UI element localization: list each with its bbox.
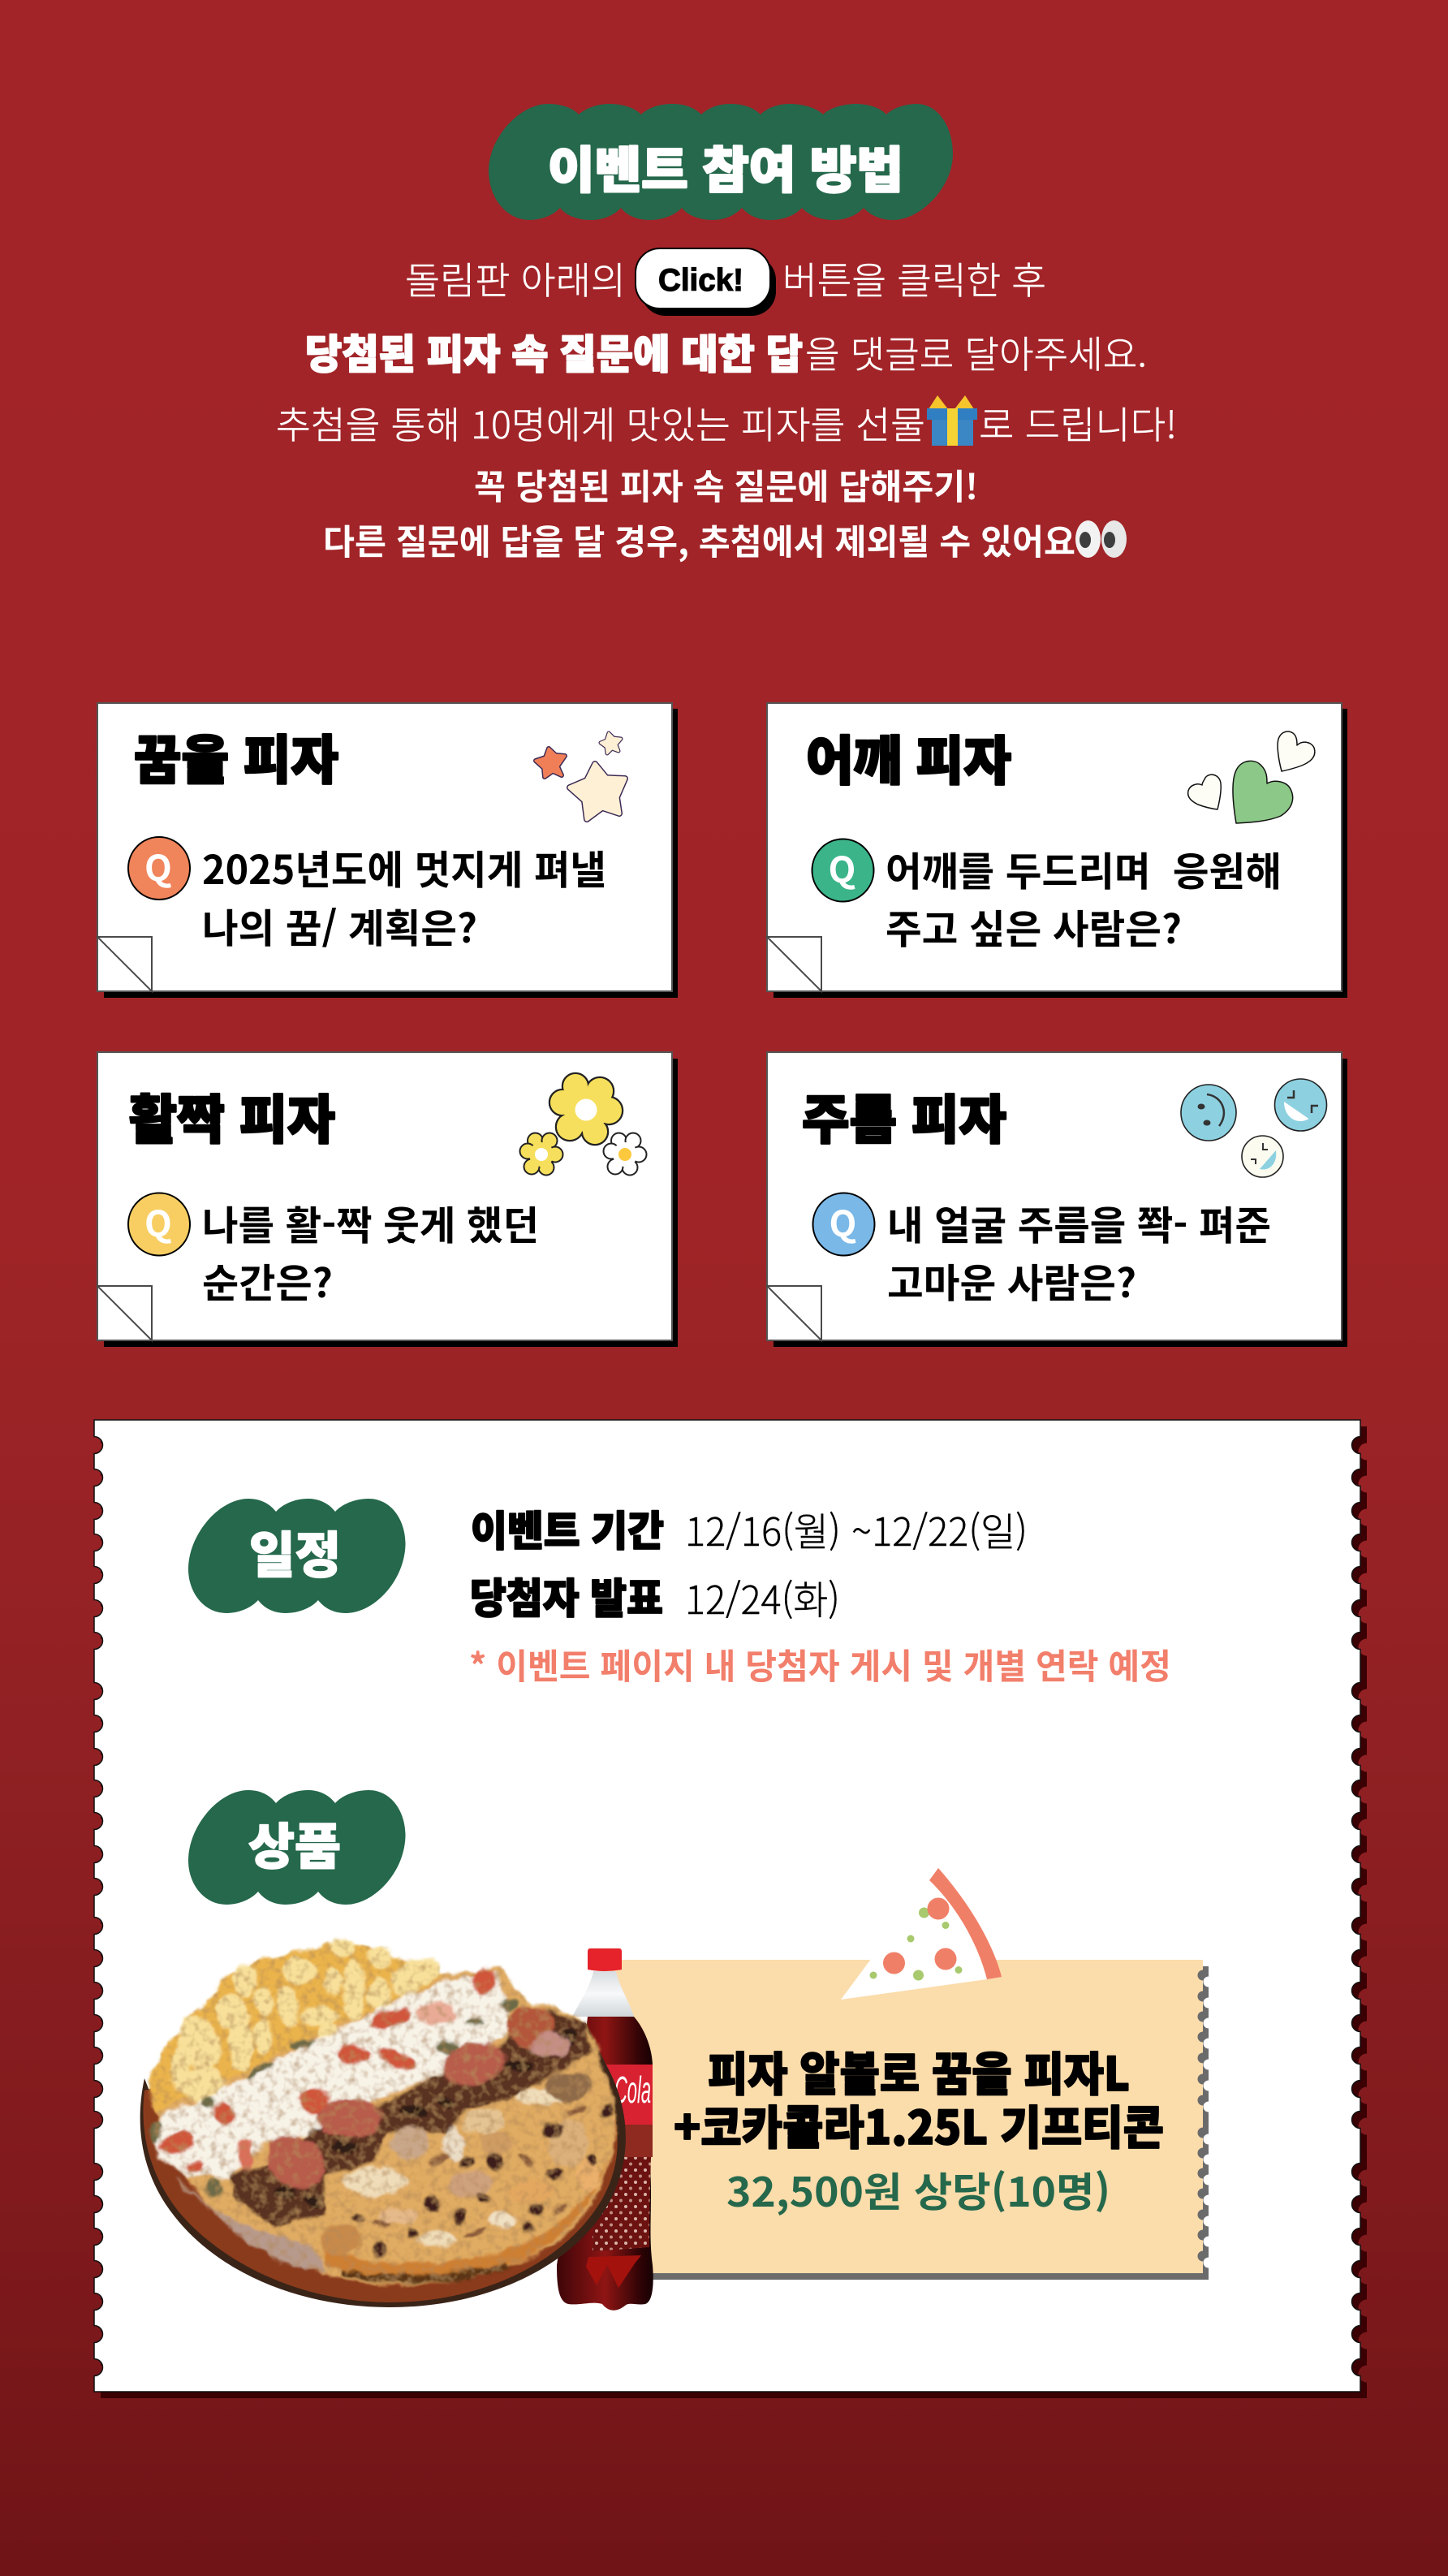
question: 나의 꿈/ 계획은?: [202, 897, 477, 955]
bottle label: [593, 2065, 653, 2125]
badge: 상품: 상품: [248, 1806, 341, 1879]
face left: [1181, 1085, 1236, 1141]
cheese and tomato band: [154, 1973, 510, 2178]
fry chunks: [170, 1938, 440, 2101]
question: 내 얼굴 주름을 쫙- 펴준: [887, 1194, 1271, 1252]
badge: 일정: [188, 1499, 406, 1613]
prize ticket: [601, 1960, 1209, 2280]
star red: [536, 749, 565, 777]
question: [887, 1194, 1271, 1310]
line 3 left: 추첨을 통해 10명에게 맛있는 피자를 선물: [276, 396, 925, 450]
icon: pizza slice: [841, 1868, 1002, 2000]
pesto traces: [150, 1999, 518, 2198]
title badge: [489, 104, 953, 220]
prize text: +코카콜라1.25L 기프티콘: [674, 2091, 1164, 2158]
card title: 활짝 피자: [129, 1077, 335, 1154]
question: 순간은?: [202, 1252, 333, 1310]
Q badge: [128, 837, 190, 900]
cola bottle: [557, 1948, 653, 2311]
line 1 right: 버튼을 클릭한 후: [782, 252, 1046, 305]
question: [886, 840, 1282, 956]
small yellow flower: [519, 1133, 563, 1176]
question: [202, 1194, 539, 1310]
line 2 emphasis: 당첨된 피자 속 질문에 대한 답: [305, 322, 803, 381]
title text: 이벤트 참여 방법: [548, 130, 903, 202]
icon: smiling faces: [1181, 1079, 1326, 1177]
line 1 left: 돌림판 아래의: [405, 252, 626, 305]
card title: 주름 피자: [802, 1077, 1006, 1154]
card title: 꿈을 피자: [134, 718, 338, 794]
card: 주름 피자: [767, 1052, 1347, 1347]
Q badge: [812, 839, 873, 901]
winners label: 당첨자 발표: [470, 1565, 663, 1625]
line 3 right: 로 드립니다!: [979, 396, 1177, 450]
Q badge: Q: [144, 839, 172, 891]
panel: schedule and prize ticket: [94, 1420, 1367, 2398]
winners date: 12/24(화): [685, 1568, 840, 1625]
badge: 상품: [188, 1790, 406, 1905]
click button: Click!: [658, 263, 743, 298]
prize text: [674, 2038, 1164, 2219]
Q badge: Q: [830, 1195, 856, 1247]
pizza photo illustration: [140, 1938, 626, 2307]
instructions text block: [276, 248, 1177, 565]
prize text: 피자 알볼로 꿈을 피자L: [708, 2038, 1130, 2104]
icon: gift: [927, 395, 977, 446]
bottle neck: [572, 1971, 634, 2017]
click button: [636, 248, 776, 316]
bottle body: [557, 2017, 653, 2311]
question: [202, 839, 606, 955]
note: * 이벤트 페이지 내 당첨자 게시 및 개별 연락 예정: [469, 1639, 1171, 1689]
pepperoni slices: [256, 2006, 570, 2198]
question: 주고 싶은 사람은?: [886, 898, 1182, 956]
question: 2025년도에 멋지게 펴낼: [202, 839, 606, 896]
meat band: [231, 2011, 593, 2227]
question: 어깨를 두드리며 응원해: [886, 840, 1282, 898]
card: 꿈을 피자: [97, 703, 678, 998]
event period label: 이벤트 기간: [471, 1498, 664, 1558]
face small: [1242, 1136, 1283, 1177]
card: 활짝 피자: [97, 1052, 678, 1347]
star big: [570, 764, 625, 819]
cream patches: [320, 2072, 600, 2255]
large yellow flower: [549, 1073, 623, 1145]
bottle flame base: [586, 2255, 641, 2288]
schedule details: [469, 1498, 1171, 1689]
almond slivers: [371, 2107, 586, 2240]
card: 어깨 피자: [767, 703, 1347, 998]
question: 나를 활-짝 웃게 했던: [202, 1194, 539, 1252]
badge: 일정: 일정: [249, 1515, 341, 1587]
Q badge: [128, 1193, 190, 1255]
question: 고마운 사람은?: [887, 1252, 1136, 1310]
icon: eyes: [1075, 520, 1127, 558]
icon: stars: [536, 733, 625, 819]
plate: [140, 2023, 626, 2307]
pizza base: [149, 1942, 616, 2285]
cola bottle: Cola: [614, 2069, 651, 2111]
dark cranberry specks: [351, 2105, 614, 2257]
line 2 rest: 을 댓글로 달아주세요.: [805, 326, 1147, 379]
line 5: 다른 질문에 답을 달 경우, 추첨에서 제외될 수 있어요: [323, 515, 1075, 565]
crust: lower edge: [325, 2151, 610, 2278]
Q badge: Q: [829, 841, 855, 893]
crust: lower left: [175, 2176, 325, 2273]
bottle cap: [588, 1948, 622, 1971]
bottle lower label stripe: [593, 2125, 653, 2157]
event period dates: 12/16(월) ~12/22(일): [685, 1500, 1028, 1557]
icon: flowers: [519, 1073, 646, 1176]
star small: [601, 733, 621, 753]
icon: hearts: [1188, 731, 1315, 823]
meat texture: [273, 2030, 576, 2206]
Q badge: Q: [144, 1195, 172, 1247]
fries region: [149, 1942, 444, 2113]
prize text: 32,500원 상당(10명): [726, 2160, 1110, 2219]
tomato pieces: [156, 1968, 495, 2173]
bottle grater pattern: [593, 2157, 651, 2251]
card title: 어깨 피자: [806, 718, 1011, 795]
small white flower: [604, 1133, 646, 1176]
face right: [1274, 1079, 1326, 1131]
line 4: 꼭 당첨된 피자 속 질문에 답해주기!: [474, 460, 978, 510]
Q badge: [813, 1193, 875, 1255]
